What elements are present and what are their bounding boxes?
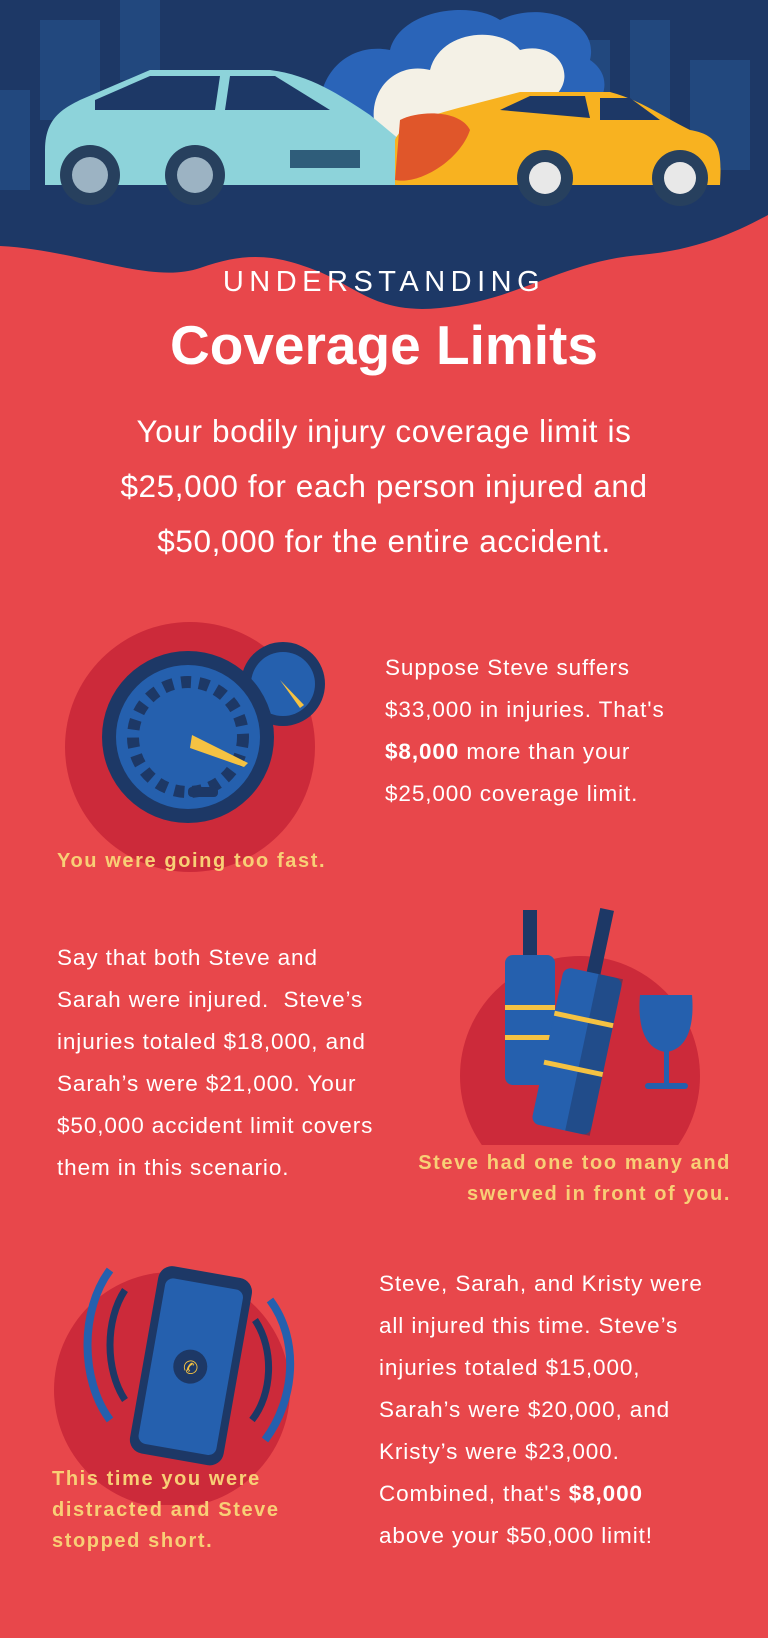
text: scenario 2: Sarah were injured. Steve’s bbox=[57, 987, 363, 1012]
text: scenario 1: $8,000 more than your bbox=[385, 739, 630, 764]
text: scenario 1 bbox=[385, 655, 665, 806]
text: scenario 2: Sarah’s were $21,000. Your bbox=[57, 1071, 356, 1096]
caption: going too fast: You were going too fast. bbox=[57, 850, 326, 872]
intro paragraph: Your bodily injury coverage limit is bbox=[137, 413, 631, 449]
caption: distracted bbox=[52, 1468, 280, 1552]
text: scenario 2 bbox=[57, 945, 373, 1180]
intro paragraph: $25,000 for each person injured and bbox=[120, 468, 648, 504]
blue car bbox=[45, 70, 400, 205]
text: scenario 1: Suppose Steve suffers bbox=[385, 655, 630, 680]
text: scenario 3: above your $50,000 limit! bbox=[379, 1523, 653, 1548]
caption: one too many bbox=[418, 1152, 731, 1205]
heading: understanding: UNDERSTANDING bbox=[223, 266, 545, 298]
smoke bbox=[320, 10, 604, 160]
text: scenario 3: Steve, Sarah, and Kristy were bbox=[379, 1271, 703, 1296]
title: coverage limits: Coverage Limits bbox=[170, 314, 598, 376]
caption: distracted: This time you were bbox=[52, 1468, 261, 1490]
icon: ringing phone bbox=[54, 1266, 294, 1505]
text: scenario 2: injuries totaled $18,000, and bbox=[57, 1029, 366, 1054]
header illustration: crash scene bbox=[0, 0, 768, 309]
text: scenario 3 bbox=[379, 1271, 703, 1548]
text: scenario 3: Combined, that's $8,000 bbox=[379, 1481, 643, 1506]
text: scenario 1: $33,000 in injuries. That's bbox=[385, 697, 665, 722]
text: scenario 1: $25,000 coverage limit. bbox=[385, 781, 638, 806]
caption: distracted: distracted and Steve bbox=[52, 1499, 280, 1521]
icon: ringing phone: ✆ bbox=[181, 1357, 200, 1379]
text: scenario 3: Sarah’s were $20,000, and bbox=[379, 1397, 670, 1422]
icon: bottles and wine glass bbox=[460, 908, 700, 1145]
text: scenario 3: Kristy’s were $23,000. bbox=[379, 1439, 620, 1464]
caption: distracted: stopped short. bbox=[52, 1530, 213, 1552]
icon: speedometer bbox=[65, 622, 325, 872]
caption: one too many: swerved in front of you. bbox=[467, 1183, 731, 1205]
text: scenario 2: $50,000 accident limit covers bbox=[57, 1113, 373, 1138]
text: scenario 2: Say that both Steve and bbox=[57, 945, 318, 970]
text: scenario 3: all injured this time. Steve’s bbox=[379, 1313, 678, 1338]
text: scenario 2: them in this scenario. bbox=[57, 1155, 289, 1180]
caption: one too many: Steve had one too many and bbox=[418, 1152, 731, 1174]
text: scenario 3: injuries totaled $15,000, bbox=[379, 1355, 640, 1380]
intro paragraph: $50,000 for the entire accident. bbox=[157, 523, 611, 559]
intro paragraph bbox=[120, 413, 648, 559]
yellow car bbox=[395, 92, 721, 206]
